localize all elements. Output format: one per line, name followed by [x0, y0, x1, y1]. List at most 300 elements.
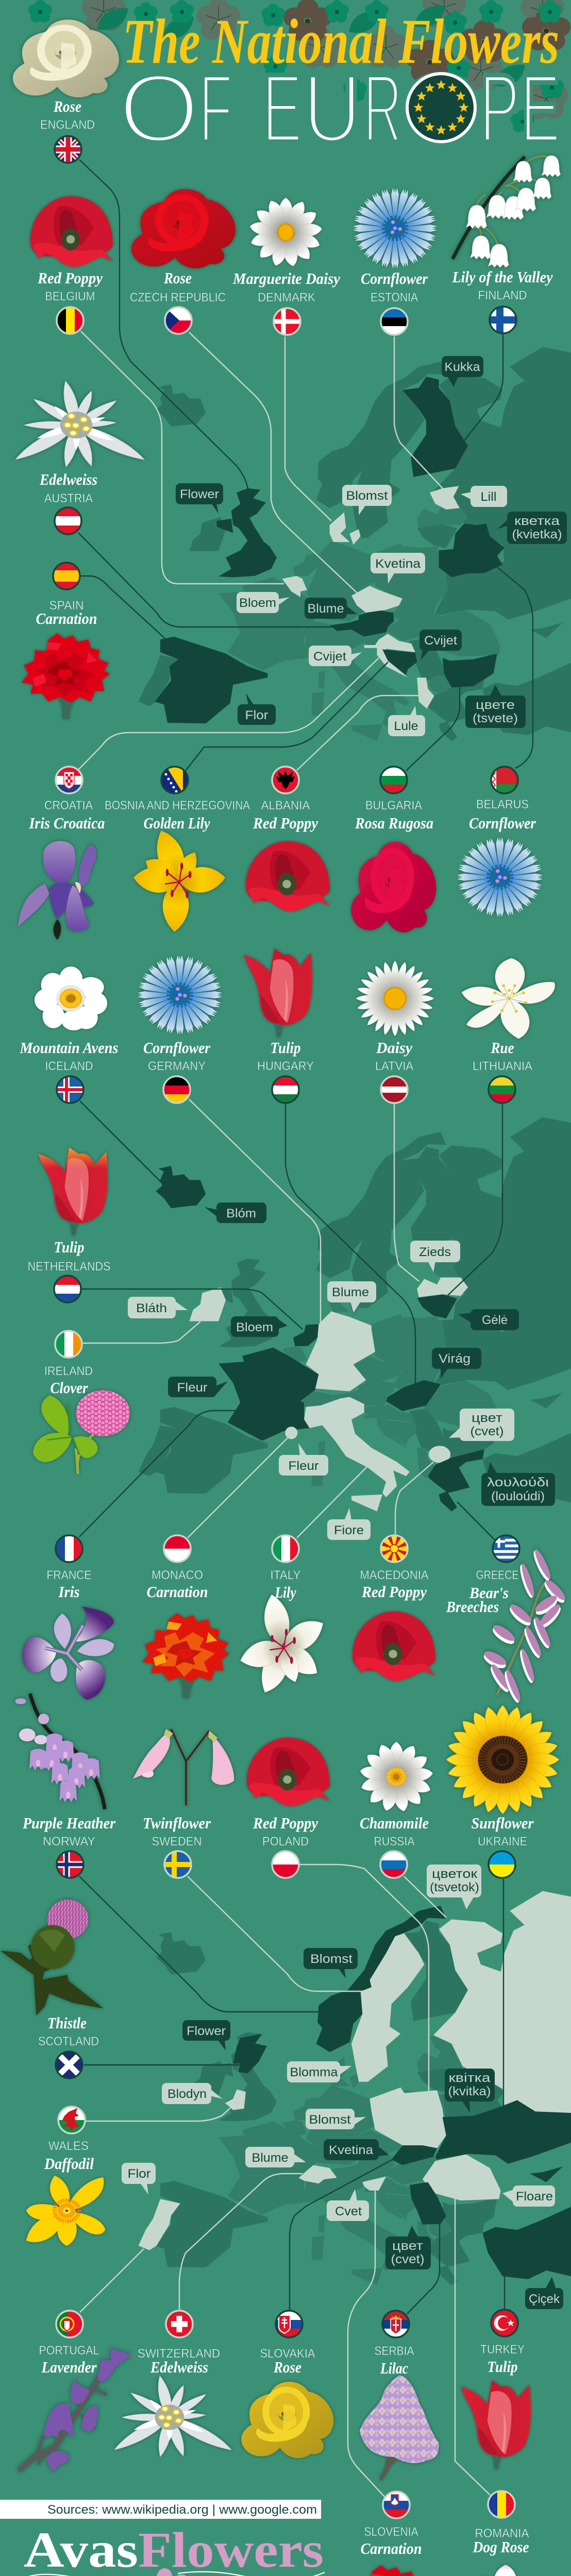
icon: red poppy [352, 1612, 435, 1681]
label: Gėlė: Gėlė [482, 1313, 508, 1327]
country name: UKRAINE [478, 1835, 527, 1849]
country name: BOSNIA AND HERZEGOVINA [105, 799, 250, 812]
flag: Monaco [164, 1535, 191, 1562]
label: kvitka [445, 2069, 495, 2113]
flower name: Twinflower [143, 1814, 211, 1832]
label: Cvijet: Cvijet [424, 634, 457, 648]
icon: cornflower [457, 837, 543, 917]
icon: lily of the valley [452, 156, 560, 267]
country name: POLAND [262, 1835, 309, 1849]
flower name: Clover [51, 1379, 88, 1397]
flower name: Tulip [270, 1039, 301, 1057]
icon: red poppy [247, 1738, 330, 1806]
label: Flower [182, 2020, 230, 2050]
flower name: Purple Heather [22, 1814, 116, 1832]
flower name: Marguerite Daisy [232, 269, 340, 287]
panel: Portugal [19, 2311, 132, 2471]
flower name: Red Poppy [253, 1814, 318, 1832]
label: Virág: Virág [439, 1352, 471, 1366]
panel: Scotland [0, 1900, 104, 2078]
panel: Switzerland [110, 2311, 236, 2458]
label: Flor [238, 693, 276, 725]
country name: SERBIA [374, 2344, 414, 2358]
label: cvet [385, 2226, 431, 2269]
country name: NORWAY [43, 1835, 95, 1849]
flower name: Lavender [41, 2358, 97, 2376]
country name: SPAIN [49, 599, 83, 613]
panel: Bosnia and Herzegovina [105, 767, 250, 933]
country name: IRELAND [44, 1364, 93, 1378]
flag: Croatia [56, 767, 82, 794]
title: R [363, 54, 402, 162]
panel: Netherlands [28, 1147, 110, 1303]
icon: red and orange carnation [142, 1613, 229, 1698]
flower name: Thistle [47, 2014, 87, 2032]
flower name: Chamomile [360, 1814, 429, 1832]
flower name: Lily [275, 1583, 296, 1601]
panel: third map of Europe [79, 1865, 571, 2497]
country name: CZECH REPUBLIC [130, 291, 226, 304]
country name: DENMARK [258, 291, 315, 304]
flower name: Cornflower [469, 814, 536, 832]
country name: NETHERLANDS [28, 1260, 110, 1274]
label: tsvete: цвете [476, 698, 515, 712]
label: Flower: Flower [187, 2024, 226, 2038]
country name: BELGIUM [45, 290, 95, 303]
panel: Latvia [356, 961, 434, 1103]
label: Kvetina [371, 553, 425, 584]
label: Flor: Flor [245, 708, 268, 722]
flag: Romania [488, 2491, 515, 2518]
country name: TURKEY [480, 2343, 525, 2357]
connectors [78, 160, 533, 771]
label: Floare: Floare [516, 2190, 553, 2204]
label: Cvijet: Cvijet [313, 650, 346, 664]
flag: Norway [57, 1851, 83, 1878]
flower name: Dog Rose [473, 2538, 529, 2556]
panel: Slovakia [241, 2311, 333, 2458]
panel: Turkey [461, 2310, 531, 2469]
icon: lavender [19, 2348, 132, 2471]
label: kvietka [497, 512, 567, 544]
label: tsvete [465, 685, 526, 728]
label: Gėlė [458, 1309, 519, 1330]
icon: red poppy [30, 196, 113, 267]
flower name: Carnation [361, 2539, 422, 2557]
panel: Bulgaria [351, 767, 436, 933]
panel: Macedonia [352, 1533, 435, 1681]
flag: Slovenia [383, 2492, 410, 2519]
icon: red rose [131, 189, 236, 268]
flower name: Red Poppy [253, 814, 318, 832]
icon: yellow rose [241, 2382, 333, 2458]
flower name: Iris [58, 1583, 79, 1601]
label: Zieds: Zieds [419, 1245, 451, 1259]
label: Cvet: Cvet [335, 2205, 362, 2218]
panel: Sweden [133, 1729, 234, 1878]
label: tsvetok: (tsvetok) [430, 1880, 479, 1894]
panel: Spain [22, 563, 110, 719]
label: Fleur [168, 1377, 228, 1397]
label: Kvetina [324, 2139, 389, 2160]
flag: Bosnia and Herzegovina [161, 767, 188, 793]
flag: Italy [272, 1535, 299, 1562]
icon: daisy [356, 961, 434, 1036]
sources bar [0, 2500, 321, 2519]
icon: rosa rugosa [351, 842, 436, 933]
country name: SLOVENIA [364, 2525, 418, 2539]
flower name: Rose [53, 97, 81, 115]
flower name: Cornflower [143, 1039, 211, 1057]
label: louloúdi: (louloúdi) [491, 1489, 545, 1503]
flag: Bulgaria [380, 767, 407, 794]
country name: BELARUS [476, 798, 529, 811]
flag: Belarus [491, 767, 518, 793]
panel: Romania [465, 2491, 543, 2576]
label: Bláth [128, 1297, 188, 1318]
icon: tulip [244, 948, 312, 1037]
icon: tulip [461, 2380, 531, 2469]
label: Flower [176, 483, 223, 514]
flag: Ireland [55, 1331, 82, 1358]
flag: Russia [380, 1851, 407, 1878]
flower name: Sunflower [471, 1814, 534, 1832]
icon: chamomile [359, 1742, 433, 1812]
country name: ITALY [270, 1568, 301, 1582]
flag: Czech Republic [165, 307, 192, 334]
flag: Greece [493, 1535, 519, 1562]
flower name continued: Breeches [446, 1598, 499, 1616]
label: cvet: (cvet) [391, 2252, 425, 2266]
label: Flor: Flor [128, 2167, 150, 2181]
label: kvitka: квітка [448, 2071, 491, 2085]
panel: Belgium [30, 196, 113, 334]
label: Blomma: Blomma [290, 2065, 338, 2079]
panel: Ukraine [446, 1705, 559, 1878]
label: Blume [305, 598, 357, 619]
label: Blume: Blume [307, 602, 344, 616]
country name: BULGARIA [365, 799, 422, 812]
label: Kukka: Kukka [444, 360, 480, 374]
country name: SWITZERLAND [138, 2347, 220, 2361]
panel: Hungary [244, 948, 314, 1104]
label: Fleur: Fleur [177, 1381, 207, 1395]
label: tsvetok: цветок [432, 1867, 478, 1881]
icon: red carnation [22, 633, 110, 719]
label: Blodyn [162, 2083, 223, 2104]
country name: ESTONIA [371, 291, 418, 304]
country name: ROMANIA [475, 2527, 529, 2540]
title: F [199, 54, 232, 162]
panel: Monaco [142, 1535, 229, 1698]
label: Bláth: Bláth [136, 1301, 167, 1315]
flower name: Rose [163, 269, 192, 287]
flower name: Carnation [36, 609, 97, 628]
panel: first map of Europe [78, 160, 571, 771]
flower name: Rosa Rugosa [355, 814, 433, 832]
flag: Lithuania [489, 1076, 515, 1104]
flag: France [56, 1535, 83, 1562]
icon: white rose [13, 20, 119, 97]
flower name: Edelweiss [150, 2358, 208, 2376]
panel: England [13, 20, 119, 163]
label: Blume [245, 2147, 306, 2167]
country name: WALES [48, 2139, 89, 2153]
label: Cvet [327, 2189, 369, 2221]
panel: Albania [246, 767, 330, 911]
title: U [303, 54, 361, 162]
flag: Finland [490, 307, 516, 333]
panel: Greece [446, 1535, 566, 1706]
panel: Belarus [457, 767, 543, 917]
label: Blóm [205, 1202, 266, 1223]
panel: Iceland [20, 967, 118, 1103]
country name: PORTUGAL [39, 2344, 99, 2358]
label: Blomst [342, 485, 392, 515]
panel: Serbia [360, 2311, 439, 2480]
flower name: Iris Croatica [29, 814, 105, 832]
icon: red carnation [346, 2565, 433, 2576]
icon: edelweiss [11, 380, 149, 468]
title [119, 6, 560, 162]
label: tsvetok [427, 1865, 481, 1909]
flag: Belgium [57, 307, 84, 334]
map: countries [139, 1891, 571, 2285]
panel: Finland [452, 156, 560, 333]
flag: Portugal [56, 2311, 83, 2337]
flag: Albania [272, 767, 299, 793]
label: Çiçek: Çiçek [529, 2292, 560, 2306]
icon: cornflower [138, 955, 222, 1035]
panel: Czech Republic [130, 189, 236, 334]
label: kvietka: кветка [514, 514, 560, 528]
label: Blodyn: Blodyn [167, 2087, 207, 2101]
country name: CROATIA [44, 799, 93, 812]
flower name: Red Poppy [37, 269, 103, 287]
panel: Wales [26, 2107, 105, 2246]
icon: marguerite daisy [249, 198, 323, 267]
icon: purple heather [15, 1693, 105, 1809]
label: Blomst [306, 2109, 366, 2129]
panel: Estonia [353, 188, 437, 335]
label: Blomst: Blomst [310, 1952, 352, 1966]
panel: Croatia [18, 767, 105, 940]
label: Floare [502, 2185, 555, 2207]
flag: Netherlands [54, 1276, 81, 1303]
flag: Estonia [381, 308, 408, 335]
label: Virág [432, 1348, 481, 1379]
title: O [402, 54, 480, 162]
flower name: Daisy [376, 1039, 412, 1057]
label: Fleur: Fleur [289, 1459, 318, 1473]
label: Fiore [327, 1508, 371, 1540]
country name: AUSTRIA [44, 492, 93, 505]
icon: pink flower [142, 2567, 191, 2576]
icon: EU stars badge [407, 74, 475, 142]
icon: lilac [360, 2375, 439, 2480]
label: kvietka: (kvietka) [512, 528, 562, 541]
flag: Turkey [491, 2310, 518, 2336]
flower name: Edelweiss [39, 470, 97, 488]
label: Zieds [410, 1241, 460, 1272]
panel: France [22, 1535, 114, 1700]
flower name: Golden Lily [143, 814, 210, 832]
flag: Ukraine [489, 1851, 515, 1878]
flag: Switzerland [166, 2311, 193, 2337]
panel: Lithuania [462, 958, 555, 1104]
label: Lill [461, 486, 507, 507]
icon: sunflower [446, 1705, 559, 1814]
label: tsvete: (tsvete) [473, 711, 518, 725]
label: Lule [388, 706, 425, 736]
label: Blóm: Blóm [226, 1207, 256, 1221]
label: Bloem: Bloem [239, 596, 276, 610]
label: Çiçek [525, 2277, 563, 2309]
label: Kukka [442, 356, 483, 387]
panel: Italy [238, 1535, 329, 1698]
title: E [262, 54, 302, 162]
panel: Germany [138, 955, 222, 1104]
country name: MACEDONIA [360, 1568, 429, 1582]
flower name: Tulip [54, 1238, 85, 1256]
country name: FINLAND [478, 289, 527, 302]
label: Lill: Lill [480, 490, 497, 504]
flag: Germany [163, 1076, 190, 1104]
country name: LITHUANIA [473, 1059, 532, 1073]
flower name: Cornflower [361, 269, 428, 287]
label: Lule: Lule [394, 719, 418, 733]
icon: golden lily [132, 825, 226, 933]
icon: dog rose [465, 2565, 543, 2576]
icon: iris croatica [18, 841, 96, 940]
flag: Scotland [56, 2052, 82, 2078]
panel: Russia [359, 1742, 433, 1878]
flower name: Daffodil [44, 2155, 94, 2173]
icon: iris [22, 1606, 114, 1700]
panel: Slovenia [346, 2492, 433, 2576]
country name: MONACO [152, 1568, 203, 1582]
top floral pattern [28, 0, 570, 132]
panel: Austria [11, 380, 149, 534]
country name: ICELAND [45, 1059, 93, 1073]
country name: GERMANY [148, 1059, 206, 1073]
panel: second map of Europe [79, 1099, 571, 1540]
label: Fiore: Fiore [334, 1523, 364, 1537]
flag: Wales [58, 2107, 85, 2133]
flag: Serbia [382, 2311, 409, 2338]
label: Bloem [231, 1316, 288, 1337]
flower name: Bear's [469, 1584, 509, 1602]
label: Cvijet [419, 630, 462, 660]
country name: ALBANIA [261, 799, 310, 812]
flower name: Rose [273, 2358, 301, 2376]
label: Blume: Blume [251, 2151, 289, 2165]
icon: cornflower [353, 188, 437, 268]
flag: Spain [53, 563, 80, 589]
title: O [119, 54, 199, 162]
icon: orange-tipped tulip [38, 1147, 109, 1235]
connectors [79, 1099, 502, 1540]
icon: bear's breeches [483, 1546, 566, 1706]
icon: daffodil [26, 2176, 105, 2246]
connectors [79, 1865, 505, 2497]
flag: United Kingdom [55, 136, 81, 163]
map: countries [139, 347, 571, 741]
flag: Hungary [272, 1076, 299, 1104]
flag: Denmark [274, 308, 300, 335]
country name: ENGLAND [40, 118, 95, 132]
label: Fleur [279, 1443, 328, 1476]
flower name: Rue [491, 1039, 514, 1057]
panel: Norway [15, 1693, 116, 1878]
country name: FRANCE [46, 1568, 92, 1582]
country name: GREECE [476, 1568, 518, 1582]
label: Blomst [304, 1948, 358, 1978]
flag: Macedonia [379, 1533, 410, 1564]
label: kvitka: (kvitka) [448, 2084, 491, 2098]
label: Bloem: Bloem [236, 1320, 273, 1334]
country name: SCOTLAND [38, 2035, 99, 2048]
flag: Austria [55, 507, 81, 534]
label: Kvetina: Kvetina [329, 2143, 374, 2157]
country name: RUSSIA [374, 1835, 414, 1849]
label: Cvijet [309, 646, 362, 666]
flower name: Carnation [146, 1583, 208, 1601]
label: Blume [327, 1281, 376, 1313]
flower name: Mountain Avens [20, 1039, 118, 1057]
icon: edelweiss [110, 2375, 236, 2458]
label: cvet: цвет [472, 1411, 502, 1425]
flower name: Lily of the Valley [452, 268, 553, 286]
flag: Latvia [381, 1076, 408, 1103]
label: Bloem [237, 592, 290, 613]
flower name: Lilac [380, 2359, 408, 2377]
icon: thistle [0, 1900, 104, 2015]
icon: red poppy [246, 841, 330, 911]
title: P [480, 54, 519, 162]
sources bar: Sources: www.wikipedia.org | www.google.com [47, 2503, 317, 2517]
label: louloúdi: λουλούδι [487, 1476, 549, 1489]
label: Kvetina: Kvetina [375, 557, 421, 571]
label: cvet [449, 1409, 514, 1441]
logo: AvasFlowers [22, 2522, 325, 2576]
flag: Poland [272, 1851, 299, 1878]
map: countries [139, 1117, 571, 1512]
swash lines [22, 2572, 325, 2576]
label: Flower: Flower [180, 487, 219, 501]
label: Blomma [287, 2061, 351, 2082]
flag: Sweden [164, 1851, 191, 1878]
panel: Ireland [33, 1331, 130, 1474]
label: cvet: (cvet) [470, 1425, 504, 1438]
label: louloúdi [481, 1462, 555, 1506]
icon: twinflower [133, 1729, 234, 1805]
label: cvet: цвет [392, 2239, 423, 2253]
icon: mountain avens [35, 967, 107, 1030]
label: Blomst: Blomst [346, 489, 388, 503]
country name: SLOVAKIA [260, 2347, 315, 2361]
flag: Slovakia [276, 2311, 303, 2338]
flag: Iceland [57, 1076, 83, 1103]
flower name: Red Poppy [361, 1583, 427, 1601]
country name: HUNGARY [257, 1059, 314, 1073]
panel: Denmark [232, 198, 340, 335]
flower name: Tulip [488, 2358, 517, 2376]
icon: rue [462, 958, 555, 1039]
country name: SWEDEN [152, 1835, 202, 1849]
icon: clover [33, 1390, 130, 1474]
panel: Poland [247, 1738, 330, 1878]
